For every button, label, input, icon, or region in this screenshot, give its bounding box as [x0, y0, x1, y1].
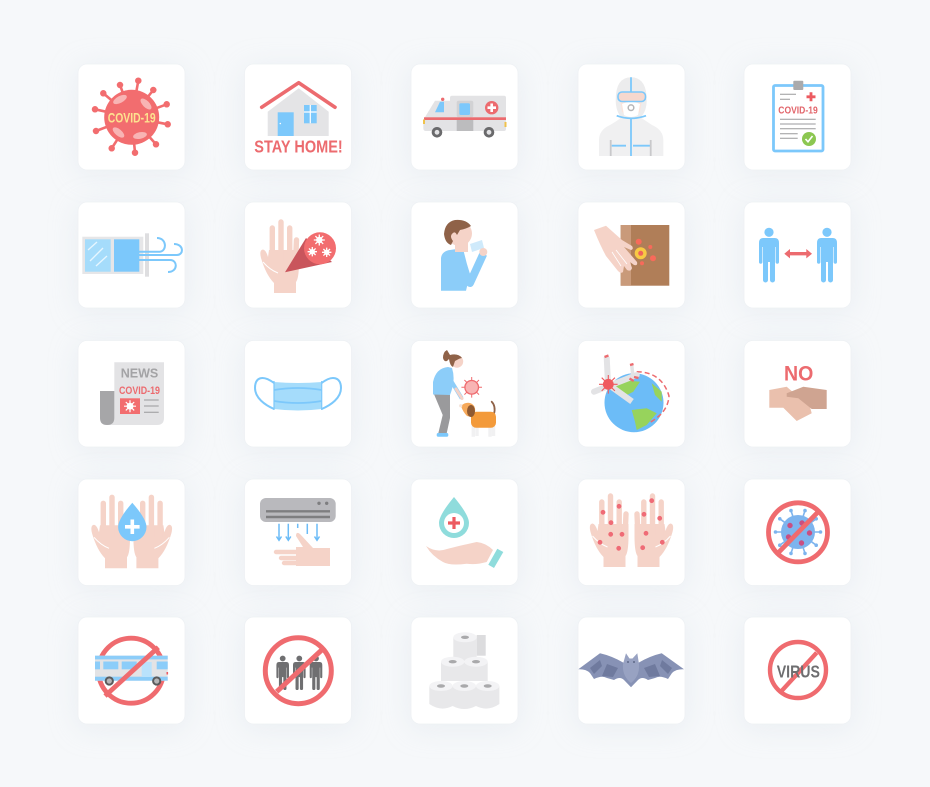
- icon: hands holding sanitizer drop: [91, 497, 172, 568]
- panel: stay home: [244, 64, 352, 170]
- panel: covid-19 virus: [78, 64, 185, 170]
- panel: news: [78, 340, 185, 447]
- panel: virus on hand: [244, 202, 352, 308]
- icon: handshake: [769, 387, 827, 421]
- icon: bat: [578, 653, 684, 687]
- panel: do not touch surfaces: [578, 202, 685, 308]
- NO text: NO: [784, 362, 813, 386]
- icon: hand with virus magnifier: [260, 222, 336, 293]
- icon: VIRUS prohibition sign: VIRUS: [777, 662, 820, 682]
- icon: virus with COVID-19 label: COVID-19: [108, 110, 156, 126]
- panel: no public transport: [78, 617, 185, 724]
- icon: man drinking: [441, 220, 487, 291]
- icon: woman with dog and virus: [433, 350, 496, 437]
- panel: no gatherings: [244, 617, 352, 724]
- icon: hazmat suit: [599, 77, 663, 156]
- icon: surgical mask: [255, 378, 341, 410]
- panel: hand sanitizer: [411, 479, 518, 586]
- panel: social distance: [744, 202, 851, 308]
- stay home text: STAY HOME!: [254, 137, 343, 157]
- icon: crowd in prohibition sign: [265, 638, 331, 704]
- panel: stop virus: [744, 479, 851, 586]
- icon: newspaper: COVID-19: [119, 385, 160, 397]
- panel: clean hands: [78, 479, 185, 586]
- panel: hand dryer: [244, 479, 352, 586]
- icon: two people with distance arrow: [759, 228, 837, 282]
- icon: clipboard report: COVID-19: [778, 104, 818, 116]
- icon: bus in prohibition sign: [95, 638, 168, 703]
- panel: drink water: [411, 202, 518, 308]
- panel: hand symptoms: [578, 479, 685, 586]
- panel: air travel spreading virus: [578, 340, 685, 447]
- panel: covid-19 report: [744, 64, 851, 170]
- icon: drop above open hand: [426, 497, 503, 568]
- icon: hands with red spots: [590, 496, 673, 567]
- panel: no handshake: [744, 340, 851, 447]
- icon: stacked toilet paper rolls: [429, 632, 499, 709]
- icon: house: [262, 83, 335, 136]
- panel: ventilation: [78, 202, 185, 308]
- icon: newspaper: NEWS: [121, 365, 159, 380]
- icon: air unit and hand: [260, 498, 336, 566]
- panel: face mask: [244, 340, 352, 447]
- icon: open window with wind: [82, 233, 182, 277]
- panel: bat: [578, 617, 685, 724]
- icon: door with germs: [594, 225, 669, 286]
- icon: virus in prohibition sign: [768, 503, 828, 562]
- panel: toilet paper: [411, 617, 518, 724]
- panel: protective suit: [578, 64, 685, 170]
- panel: pets: [411, 340, 518, 447]
- icon: newspaper: [100, 362, 164, 425]
- panel: ambulance: [411, 64, 518, 170]
- panel: no virus: [744, 617, 851, 724]
- icon: plane over globe: [594, 356, 669, 432]
- icon: ambulance: [423, 96, 506, 138]
